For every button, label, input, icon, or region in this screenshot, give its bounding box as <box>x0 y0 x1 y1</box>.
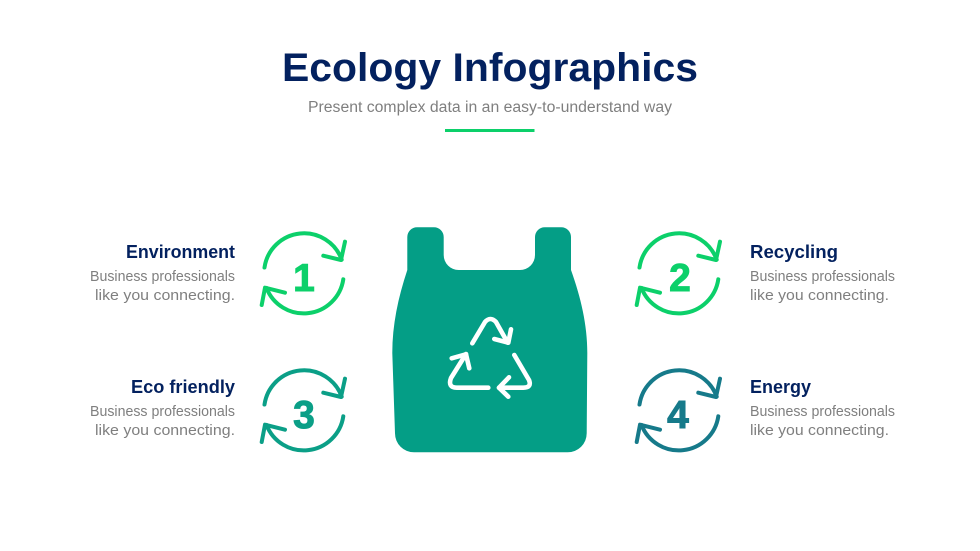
central shopping bag icon <box>392 227 587 452</box>
item 1: cycle icon with number 1 <box>262 233 345 313</box>
item 1: Environment text: like you connecting. <box>95 288 235 304</box>
item 3: Eco friendly text: like you connecting. <box>95 423 235 439</box>
item 4: Energy text <box>750 376 895 439</box>
accent underline <box>445 129 534 132</box>
subtitle: Present complex data in an easy-to-understand way <box>308 99 672 116</box>
item 1: Environment text: Business professionals <box>90 269 235 285</box>
title: Ecology Infographics <box>282 46 698 90</box>
item 3: Eco friendly text <box>90 376 236 439</box>
item 2: Recycling text: Recycling <box>750 241 838 262</box>
item 2: Recycling text <box>750 241 895 304</box>
item 4: Energy text: Business professionals <box>750 404 895 420</box>
item 1: cycle icon with number 1: 1 <box>293 257 315 300</box>
item 2: cycle icon with number 2: 2 <box>669 257 691 300</box>
item 4: Energy text: Energy <box>750 376 812 397</box>
item 2: Recycling text: Business professionals <box>750 269 895 285</box>
icon: recycling triangle <box>450 319 530 397</box>
item 4: Energy text: like you connecting. <box>750 423 889 439</box>
item 3: Eco friendly text: Eco friendly <box>131 376 236 397</box>
item 3: Eco friendly text: Business professionals <box>90 404 235 420</box>
item 2: cycle icon with number 2 <box>637 233 720 313</box>
item 4: cycle icon with number 4: 4 <box>667 394 689 437</box>
item 1: Environment text: Environment <box>126 241 235 262</box>
item 1: Environment text <box>90 241 235 304</box>
item 2: Recycling text: like you connecting. <box>750 288 889 304</box>
item 3: cycle icon with number 3: 3 <box>293 394 315 437</box>
item 4: cycle icon with number 4 <box>637 370 720 450</box>
item 3: cycle icon with number 3 <box>262 370 345 450</box>
